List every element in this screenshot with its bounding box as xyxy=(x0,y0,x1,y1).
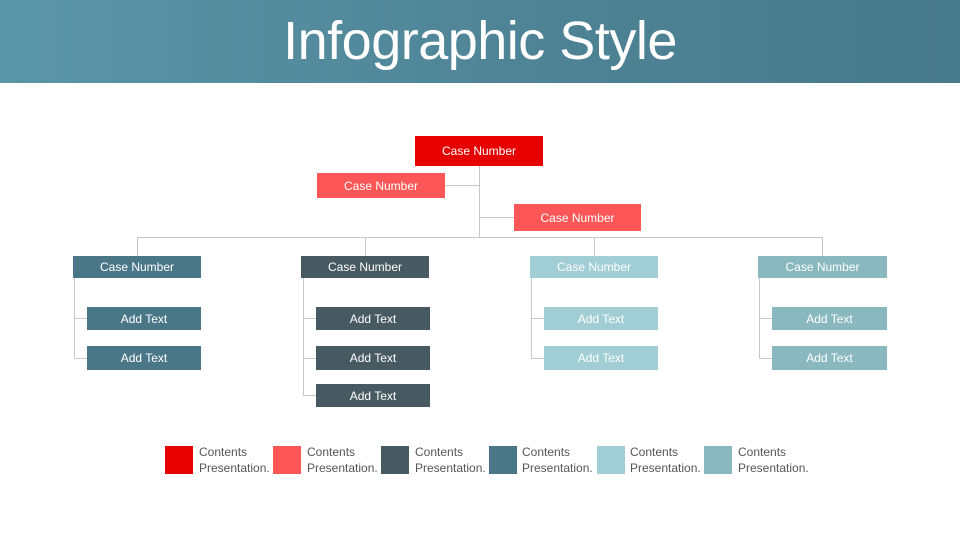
column 3: Add Text xyxy=(578,351,624,365)
column 1: Add Text xyxy=(121,312,167,326)
column 1: Case Number xyxy=(100,260,174,274)
column 3: Add Text xyxy=(578,312,624,326)
header banner xyxy=(0,0,960,83)
legend: Presentation. xyxy=(630,461,701,475)
column 2: Add Text xyxy=(350,351,396,365)
legend: Presentation. xyxy=(522,461,593,475)
column 4 xyxy=(758,256,887,370)
legend: Presentation. xyxy=(307,461,378,475)
column 2: Add Text xyxy=(350,388,396,402)
legend: Contents xyxy=(738,445,786,459)
column 1: Add Text xyxy=(121,351,167,365)
box level 2 right: Case Number xyxy=(540,210,615,224)
legend: Presentation. xyxy=(738,461,809,475)
box level 2 left xyxy=(317,173,445,198)
column 4: Add Text xyxy=(806,351,853,365)
column 2: Case Number xyxy=(328,260,402,274)
column 2: Add Text xyxy=(350,312,396,326)
top box: Case Number xyxy=(442,144,516,158)
legend xyxy=(165,445,809,475)
column 2 xyxy=(301,256,430,407)
legend: Presentation. xyxy=(199,461,270,475)
legend: Contents xyxy=(199,445,247,459)
legend: Contents xyxy=(522,445,570,459)
column 4: Case Number xyxy=(785,260,860,274)
legend: Contents xyxy=(307,445,355,459)
legend: Presentation. xyxy=(415,461,486,475)
column 4: Add Text xyxy=(806,312,853,326)
legend: Contents xyxy=(630,445,678,459)
column 3: Case Number xyxy=(557,260,631,274)
column 1 xyxy=(73,256,201,370)
top box xyxy=(415,136,543,166)
title: Infographic Style xyxy=(283,11,677,71)
box level 2 left: Case Number xyxy=(344,178,418,192)
box level 2 right xyxy=(514,204,641,231)
column 3 xyxy=(530,256,658,370)
legend: Contents xyxy=(415,445,463,459)
